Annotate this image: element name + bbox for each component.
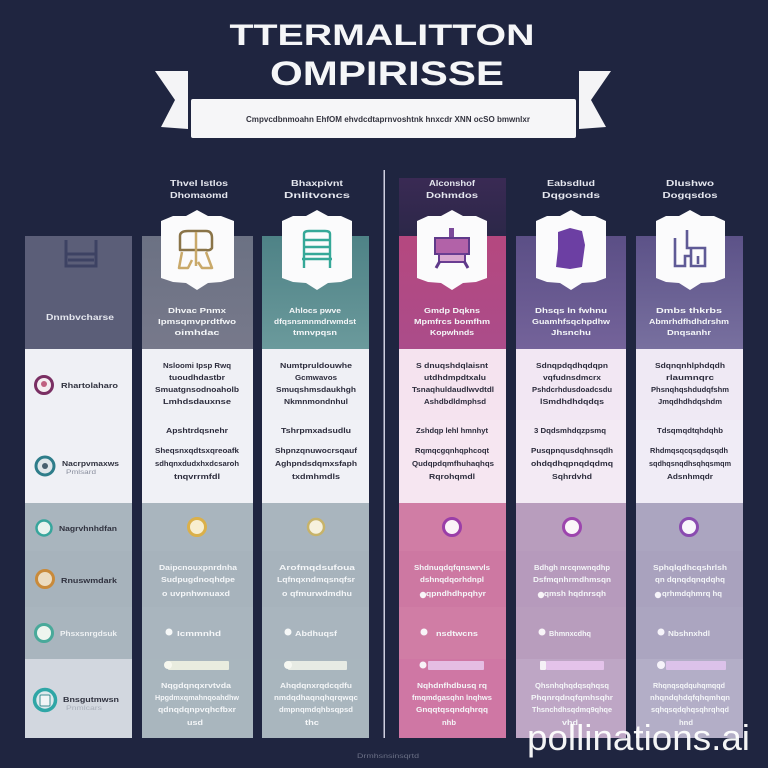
row 2 text: Tshrpmxadsudlu (281, 426, 351, 435)
row 6 slider (284, 661, 347, 670)
row 6 text: nmdqdhaqnqhqrqwqc (274, 693, 358, 702)
icon: row 3 (36, 520, 52, 536)
label: row 2: Nacrpvmaxws (62, 459, 119, 468)
row 1 text: Smuatgnsodnoaholb (155, 385, 239, 394)
row 1 text: Gcmwavos (295, 373, 337, 382)
row 1 text: Ashdbdldmphsd (424, 397, 486, 406)
row 1 text: Phsnqhqshdudqfshm (651, 385, 729, 394)
title: OMPIRISSE (270, 55, 504, 93)
row 2 text: txdmhmdls (292, 472, 340, 481)
icon: row 1 (36, 376, 52, 394)
label: row 5: Phsxsnrgdsuk (60, 629, 118, 638)
shield badge (161, 210, 234, 290)
header text: Dhvac Pnmx (168, 306, 227, 315)
row 3 marker (308, 519, 324, 535)
shield badge (417, 210, 487, 290)
header text: Mpmfrcs bomfhm (414, 317, 490, 326)
label: row 2: Pmlsard (66, 470, 96, 476)
row 6 text: Qhsnhqhqdqsqhqsq (535, 681, 609, 690)
watermark: pollinations.ai (527, 717, 750, 758)
row 1 text: lSmdhdhdqdqs (540, 397, 604, 406)
row 4 text (159, 563, 238, 598)
row 4 text: Lqfnqxndmqsnqfsr (277, 575, 355, 584)
column 0: row labels: Dnmbvcharse (46, 313, 115, 322)
subtitle ribbon banner: Cmpvcdbnmoahn EhfOM ehvdcdtaprnvoshtnk hnxcdr XNN ocSO bmwnlxr (246, 114, 531, 124)
row 2 text: Apshtrdqsnehr (166, 426, 228, 435)
column heading (284, 179, 351, 200)
row 5 text: nsdtwcns (436, 629, 478, 638)
header text: Dhsqs ln fwhnu (535, 306, 608, 315)
row 6 text: Thsnchdhsqdmq9qhqe (532, 705, 612, 714)
row 3 marker (188, 518, 206, 536)
row 4 text: Sphqlqdhcqshrlsh (653, 563, 727, 572)
row 5 text: Bhmnxcdhq (549, 629, 591, 638)
header text: dfqsnsmnmdrwmdst (274, 317, 357, 326)
label: row 6: Pnmlcars (66, 706, 102, 712)
row 6 text: Hpgdmxqmahnqoahdhw (155, 693, 239, 702)
label: row 6: Bnsgutmwsn (63, 695, 119, 704)
row 6 text: hnd (679, 718, 693, 727)
row 6 text (531, 681, 613, 727)
subtitle ribbon banner (155, 71, 611, 138)
row 1 text: Sdnqpdqdhqdqpn (536, 361, 608, 370)
header text (274, 306, 357, 337)
column heading: Dnlitvoncs (284, 191, 351, 200)
row 4 text (653, 563, 727, 598)
column heading: Dohmdos (426, 191, 479, 200)
row 6 text: vhd (562, 718, 578, 727)
column 2 (262, 179, 369, 738)
row 2 text: Rqmqcgqnhqphcoqt (415, 446, 489, 455)
header text: oimhdac (174, 328, 220, 337)
row 5 text: Icmmnhd (177, 629, 222, 638)
row 6 text: fmqmdgasqhn lnqhws (412, 693, 492, 702)
row 4 text (533, 563, 611, 598)
row 1 text: Nkmnmondnhul (284, 397, 348, 406)
column heading (662, 179, 718, 200)
icon: magenta chair (435, 228, 469, 268)
row 3 marker (564, 518, 580, 536)
row 2 text: tnqvrrmfdl (174, 472, 220, 481)
column heading: Thvel Istlos (170, 179, 229, 188)
row 1 text: Lmhdsdauxnse (163, 397, 231, 406)
row 1 text: Jmqdhdhdqshdm (658, 397, 722, 406)
row 6 text: nhqndqhdqfqhqmhqn (650, 693, 730, 702)
column heading: Dlushwo (666, 179, 714, 188)
row 1 text (412, 361, 494, 406)
row 6 text: Nqgdqnqxrvtvda (161, 681, 232, 690)
row 1 text: Sdqnqnhlphdqdh (655, 361, 725, 370)
row 4 text: o uvpnhwnuaxd (162, 589, 230, 598)
row 1 text: utdhdmpdtxalu (424, 373, 486, 382)
row 2 text: Rhdmqsqcqsqdqsqdh (650, 446, 728, 455)
column heading: Dogqsdos (662, 191, 718, 200)
row 5 text: Nbshnxhdl (668, 629, 710, 638)
header text: Dmbs thkrbs (656, 306, 722, 315)
column heading: Alconshof (429, 179, 475, 188)
header text: Dnqsanhr (667, 328, 711, 337)
row 2 text: 3 Dqdsmhdqzpsmq (534, 426, 606, 435)
vertical divider (384, 170, 385, 738)
row 5 text (166, 628, 222, 638)
row 2 text: Adsnhmqdr (667, 472, 713, 481)
row 1 text: Smuqshmsdaukhgh (276, 385, 356, 394)
column 1 (142, 179, 253, 738)
header text: Guamhfsqchpdhw (532, 317, 610, 326)
row 5 text (420, 628, 478, 638)
row 6 text (274, 681, 358, 727)
row 4 text: Dsfmqnhrmdhmsqn (533, 575, 611, 584)
icon: teal chair (302, 231, 332, 268)
icon: row 5 (36, 624, 52, 642)
row 2 text: sdhqnxdudxhxdcsaroh (155, 459, 239, 468)
column 4 (516, 179, 626, 738)
title: TTERMALITTON (230, 19, 534, 52)
icon: gold chair (179, 231, 212, 268)
column 0: row labels (25, 236, 132, 738)
column 5 (636, 179, 743, 738)
column heading: Dqgosnds (542, 191, 601, 200)
header text: tmnvpqsn (293, 328, 338, 337)
row 6 text: usd (187, 718, 203, 727)
row 2 text (275, 426, 358, 481)
row 5 text: Abdhuqsf (295, 629, 338, 638)
icon: row 2 (36, 457, 54, 475)
icon: row 4 (36, 570, 54, 588)
header text (649, 306, 729, 337)
header cell (25, 236, 132, 349)
row 6 text: thc (305, 718, 319, 727)
label: row 4: Rnuswmdark (61, 576, 118, 585)
row 2 text (155, 426, 240, 481)
row 1 text (276, 361, 356, 406)
row 2 text: Qudqpdqmfhuhaqhqs (412, 459, 494, 468)
shield badge (282, 210, 352, 290)
header text: Kopwhnds (430, 328, 474, 337)
row 4 text: qrhmdqhmrq hq (662, 589, 722, 598)
row 3 marker (444, 518, 460, 536)
row 4 text: Bdhgh nrcqnwnqdhp (534, 563, 610, 572)
row 3 marker (680, 518, 698, 536)
label: row 2 (62, 459, 119, 476)
row 6 text: Rhqnqsqdquhqmqqd (653, 681, 725, 690)
row 4 text: Daipcnouxpnrdnha (159, 563, 238, 572)
title (230, 19, 534, 93)
icon: purple solid (556, 228, 585, 269)
row 6 text (412, 681, 492, 727)
row 2 text: Shpnzqnuwocrsqauf (275, 446, 358, 455)
row 4 text: qmsh hqdnrsqh (544, 589, 606, 598)
row 1 text: Nsloomi Ipsp Rwq (163, 361, 231, 370)
label: row 3: Nagrvhnhdfan (59, 524, 117, 533)
header text (158, 306, 237, 337)
row 6 slider (420, 661, 484, 670)
row 4 text: Shdnuqdqfqnswrvls (414, 563, 490, 572)
row 2 text: Aghpndsdqmxsfaph (275, 459, 357, 468)
row 6 text: Nqhdnfhdbusq rq (417, 681, 487, 690)
row 6 slider (164, 661, 229, 670)
row 6 text (650, 681, 730, 727)
column heading: Bhaxpivnt (291, 179, 343, 188)
row 6 slider (657, 661, 726, 670)
row 2 text: Tdsqmqdtqhdqhb (657, 426, 723, 435)
column heading: Eabsdlud (547, 179, 595, 188)
column heading (542, 179, 601, 200)
row 4 text: o qfmurwdmdhu (282, 589, 352, 598)
row 1 text: Numtpruldouwhe (280, 361, 352, 370)
row 2 text: Pusqpnqusdqhnsqdh (531, 446, 613, 455)
row 2 text: Sheqsnxqdtsxqreoafk (155, 446, 240, 455)
header text (532, 306, 610, 337)
row 1 text: S dnuqshdqlaisnt (416, 361, 489, 370)
row 2 text: Sqhrdvhd (552, 472, 592, 481)
row 6 text: sqhqsqdqhqsqhrqhqd (651, 705, 729, 714)
column heading (170, 179, 229, 200)
row 1 text (532, 361, 612, 406)
row 5 text (284, 628, 338, 638)
row 1 text: Tsnaqhuldaudlwvdtdl (412, 385, 494, 394)
row 5 text (658, 628, 710, 638)
row 4 text (277, 563, 356, 598)
header text: Ahlocs pwve (289, 306, 341, 315)
row 6 text (155, 681, 239, 727)
icon: row 6 (34, 690, 56, 710)
row 1 text: tuoudhdastbr (169, 373, 225, 382)
row 2 text: Rqrohqmdl (429, 472, 475, 481)
row 1 text: Pshdcrhdusdoadcsdu (532, 385, 612, 394)
header text: Abmrhdfhdhdrshm (649, 317, 729, 326)
shield badge (656, 210, 725, 290)
column heading (426, 179, 479, 200)
row 2 text (531, 426, 613, 481)
row 2 text: ohdqdhqpnqdqdmq (531, 459, 613, 468)
row 6 text: Gnqqtqsqndqhrqq (416, 705, 488, 714)
row 2 text (412, 426, 494, 481)
header text: Jhsnchu (551, 328, 592, 337)
icon: faint chair (66, 240, 96, 266)
icon: lilac outline (675, 230, 705, 266)
footer note: Drmhsnsinsqrtd (357, 754, 419, 760)
header text (414, 306, 490, 337)
row 4 text: qpndhdhpqhyr (426, 589, 486, 598)
row 4 text (414, 563, 490, 598)
row 1 text (155, 361, 239, 406)
row 4 text: qn dqnqdqnqdqhq (655, 575, 725, 584)
row 4 text: dshnqdqorhdnpl (420, 575, 484, 584)
header text: Gmdp Dqkns (424, 306, 480, 315)
column heading: Dhomaomd (170, 191, 228, 200)
row 6 text: Ahqdqnxrqdcqdfu (280, 681, 352, 690)
header text: Ipmsqmvprdtfwo (158, 317, 237, 326)
row 4 text: Sudpugdnoqhdpe (161, 575, 235, 584)
row 6 text: qdnqdqnpvqhcfbxr (158, 705, 236, 714)
row 1 text (651, 361, 729, 406)
row 1 text: vqfudnsdmcrx (543, 373, 602, 382)
row 6 text: Phqnrqdnqfqmhsqhr (531, 693, 613, 702)
row 2 text: Zshdqp lehl hmnhyt (416, 426, 489, 435)
row 6 slider (540, 661, 604, 670)
shield badge (536, 210, 606, 290)
row 6 text: dmpnqmdqhbsqpsd (279, 705, 353, 714)
row 1 text: rlaumnqrc (666, 373, 714, 382)
label: row 6 (63, 695, 119, 712)
row 4 text: Arofmqdsufoua (279, 563, 356, 572)
label: row 1: Rhartolaharo (61, 381, 118, 390)
row 6 text: nhb (442, 718, 456, 727)
row 2 text: sqdhqsnqdhsqhqsmqm (649, 459, 731, 468)
column 3 (399, 178, 506, 738)
row 2 text (649, 426, 731, 481)
